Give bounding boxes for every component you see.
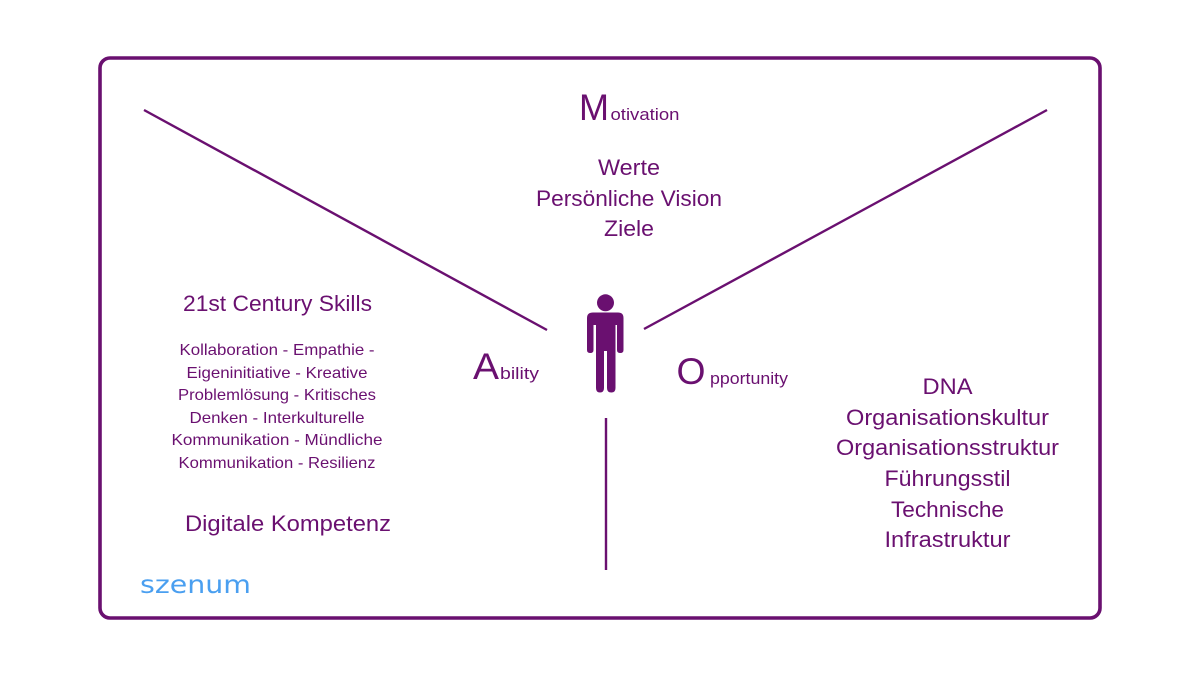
panel: rounded frame	[100, 58, 1100, 618]
text block: skills list: Kollaboration - Empathie -	[180, 342, 374, 359]
line: upper left divider	[144, 110, 547, 330]
text block: opportunity items: Organisationskultur	[846, 405, 1050, 430]
heading: 21st Century Skills: 21st Century Skills	[183, 291, 372, 316]
text block: opportunity items: Infrastruktur	[884, 527, 1011, 552]
heading: Motivation: otivation	[610, 106, 680, 124]
text block: skills list: Eigeninitiative - Kreative	[186, 365, 368, 382]
heading: Opportunity: O	[676, 351, 706, 392]
heading: Opportunity: pportunity	[710, 370, 789, 388]
text block: opportunity items: Technische	[891, 497, 1004, 522]
text block: opportunity items: Organisationsstruktur	[836, 435, 1060, 460]
text block: opportunity items	[836, 374, 1060, 552]
text block: motivation items	[536, 155, 722, 241]
line: lower vertical divider	[605, 418, 607, 570]
text block: skills list: Kommunikation - Resilienz	[178, 455, 376, 472]
text block: skills list	[172, 342, 383, 472]
heading: Ability: bility	[500, 365, 540, 383]
text block: skills list: Problemlösung - Kritisches	[178, 387, 376, 404]
icon: person	[587, 294, 624, 392]
heading: Ability: A	[473, 346, 499, 387]
heading: Opportunity	[676, 351, 789, 392]
text block: opportunity items: Führungsstil	[884, 466, 1010, 491]
text block: opportunity items: DNA	[922, 374, 972, 399]
heading: Motivation	[579, 87, 680, 128]
text block: motivation items: Persönliche Vision	[536, 186, 722, 211]
text block: skills list: Denken - Interkulturelle	[190, 410, 365, 427]
text block: skills list: Kommunikation - Mündliche	[172, 432, 383, 449]
heading: Motivation: M	[579, 87, 609, 128]
heading: Ability	[473, 346, 540, 387]
text block: motivation items: Ziele	[604, 216, 654, 241]
heading: Digitale Kompetenz: Digitale Kompetenz	[185, 511, 391, 536]
text block: motivation items: Werte	[598, 155, 660, 180]
logo: szenum: szenum	[140, 570, 251, 599]
line: upper right divider	[644, 110, 1047, 329]
